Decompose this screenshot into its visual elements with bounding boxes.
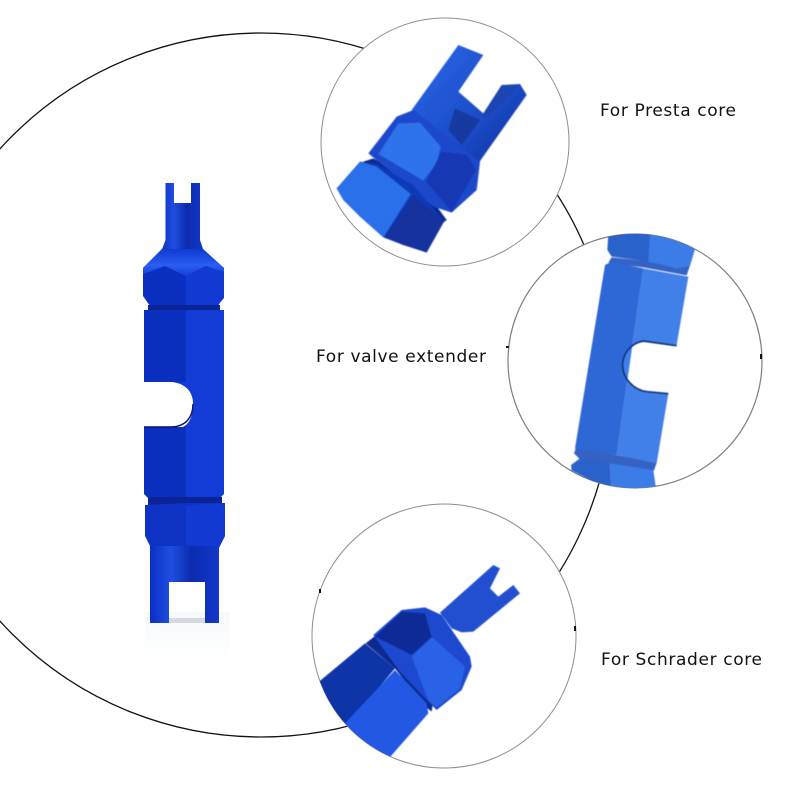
- Schrader upper nut: [373, 607, 472, 710]
- extender top nut: [607, 232, 650, 262]
- extender body light face: [617, 268, 688, 463]
- Presta upper nut: [368, 110, 480, 213]
- detail circle: Schrader core: [305, 504, 576, 768]
- extender bottom nut: [570, 458, 612, 486]
- top fork stem: [161, 183, 204, 252]
- extender lower collar: [574, 447, 657, 471]
- Schrader nut backing: [366, 636, 433, 712]
- label: Schrader: For Schrader core: [601, 650, 762, 670]
- connecting circle outline: [0, 33, 613, 737]
- hex body with side slot: [144, 310, 224, 498]
- tick marks on ring: [506, 347, 761, 359]
- upper nut: [143, 249, 224, 306]
- Schrader fork stem: [440, 565, 520, 632]
- extender upper collar: [608, 257, 690, 275]
- lower socket with window: [150, 546, 219, 623]
- detail circle: Presta core: [321, 18, 569, 266]
- detail circle: valve extender: [506, 232, 762, 493]
- Presta lower nut: [337, 162, 444, 253]
- lower nut: [145, 503, 225, 548]
- Presta fork stem: [412, 45, 527, 163]
- label: valve extender: For valve extender: [316, 347, 486, 367]
- label: Presta: For Presta core: [600, 101, 736, 121]
- main valve tool: [143, 183, 230, 664]
- reflection under tool: [145, 612, 230, 664]
- extender body dark face: [575, 262, 643, 455]
- Presta nut backing: [363, 158, 447, 230]
- dark neck between body and lower nut: [148, 497, 222, 505]
- tick marks on ring: [320, 589, 575, 631]
- Schrader lower nut: [305, 643, 395, 733]
- dark neck between upper nut and body: [148, 305, 220, 311]
